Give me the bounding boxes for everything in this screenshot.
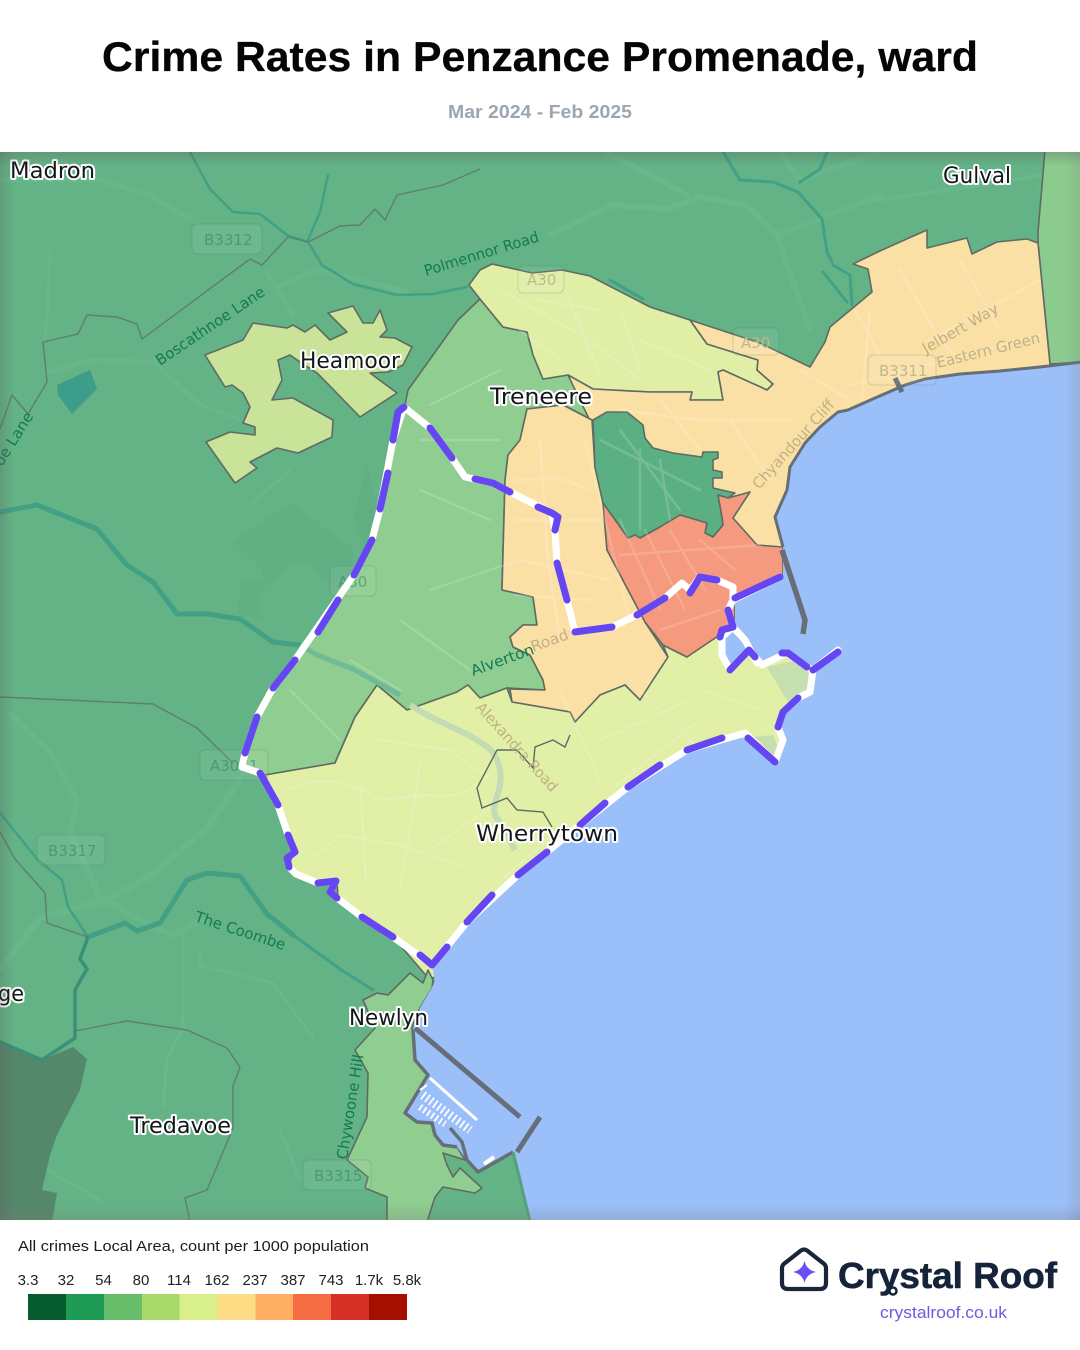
- legend: scale values: 54: [95, 1272, 112, 1289]
- road shields: A30: [741, 334, 770, 352]
- panel: choropleth map: [0, 150, 1080, 1222]
- road labels: Chywoone Hill: [333, 1053, 368, 1161]
- legend: scale values: 32: [58, 1272, 74, 1289]
- legend: scale values: 114: [167, 1272, 191, 1289]
- place labels: Newlyn: [349, 1006, 428, 1031]
- zone: red high-crime area: [603, 492, 783, 657]
- road labels: Chyandour Cliff: [749, 395, 839, 493]
- road labels: Alverton: [468, 640, 536, 680]
- inner ward lines: [477, 735, 570, 827]
- legend: title: All crimes Local Area, count per 1000 population: [18, 1238, 369, 1255]
- legend: scale values: 162: [204, 1272, 230, 1289]
- road shields: B3317: [48, 842, 96, 860]
- road labels: [0, 228, 1042, 1161]
- logo: wordmark: Crystal Roof: [838, 1255, 1058, 1296]
- legend: scale values: 237: [242, 1272, 268, 1289]
- legend: scale values: 743: [318, 1272, 344, 1289]
- road labels: Boscathnoe Lane: [152, 283, 268, 369]
- road shields: B3312: [204, 231, 252, 249]
- zone: pale green parks: [754, 661, 808, 756]
- rivers and lake: [0, 152, 852, 1060]
- legend: colour bar: [28, 1294, 407, 1320]
- place labels: Gulval: [943, 164, 1011, 189]
- coast and piers: [405, 362, 1080, 1222]
- zone: central pale orange: [502, 405, 668, 722]
- road shields: B3315: [314, 1167, 362, 1185]
- zone: Heamoor: [205, 306, 412, 483]
- place labels: Heamoor: [300, 349, 401, 374]
- website link: crystalroof.co.uk: [880, 1304, 1008, 1322]
- sea: [405, 362, 1080, 1222]
- legend: scale values: 80: [133, 1272, 149, 1289]
- river through Wherrytown: [410, 705, 515, 850]
- place labels: Treneere: [489, 385, 592, 410]
- river in Treneere ward: [300, 645, 400, 695]
- faint wooded patches: [233, 462, 383, 620]
- place labels: [0, 159, 1011, 1139]
- road labels: Eastern Green: [935, 329, 1042, 372]
- road labels: Road: [528, 626, 571, 656]
- roads on green land: [0, 152, 1080, 1200]
- zone: eastern pale orange: [568, 230, 1060, 570]
- logo: house icon with star: [782, 1250, 826, 1289]
- road labels: Jelbert Way: [918, 299, 1002, 358]
- title: Crime Rates in Penzance Promenade, ward: [102, 33, 978, 80]
- streets on coloured zones: [284, 259, 1042, 1030]
- light green ward north east: [1038, 150, 1080, 364]
- zone: Newlyn: [347, 970, 482, 1222]
- legend: scale values: 387: [280, 1272, 306, 1289]
- map edge vignette: [0, 152, 1080, 1220]
- legend: scale values: [18, 1272, 422, 1289]
- legend: scale values: 5.8k: [393, 1272, 422, 1289]
- legend: scale values: 3.3: [18, 1272, 38, 1289]
- thin ward lines on green land: [0, 169, 480, 1222]
- zone: Treneere ward: [243, 299, 592, 775]
- ward boundary: white base line: [242, 407, 838, 965]
- road labels: The Coombe: [192, 907, 288, 954]
- subtitle: date range: Mar 2024 - Feb 2025: [448, 101, 632, 122]
- place labels: Tredavoe: [129, 1114, 231, 1139]
- zone: north yellow: [469, 264, 773, 400]
- road shields: [37, 224, 936, 1190]
- place labels: Madron: [10, 159, 95, 184]
- land base: [0, 152, 1080, 1220]
- zone: dark green low-crime area: [593, 412, 735, 538]
- road shields: B3311: [879, 362, 927, 380]
- road shields: A3071: [210, 757, 258, 775]
- marina pontoons: [420, 1078, 494, 1164]
- legend: scale values: 1.7k: [355, 1272, 384, 1289]
- road shields: A30: [338, 573, 367, 591]
- darker ward bottom left: [0, 1042, 87, 1222]
- road shields: A30: [527, 271, 556, 289]
- road labels: Alexandra Road: [472, 699, 562, 795]
- zone: Wherrytown yellow: [265, 625, 820, 980]
- road labels: Polmennor Road: [422, 228, 541, 280]
- place labels: Wherrytown: [476, 822, 618, 847]
- ward boundary: purple dashes: [245, 407, 838, 965]
